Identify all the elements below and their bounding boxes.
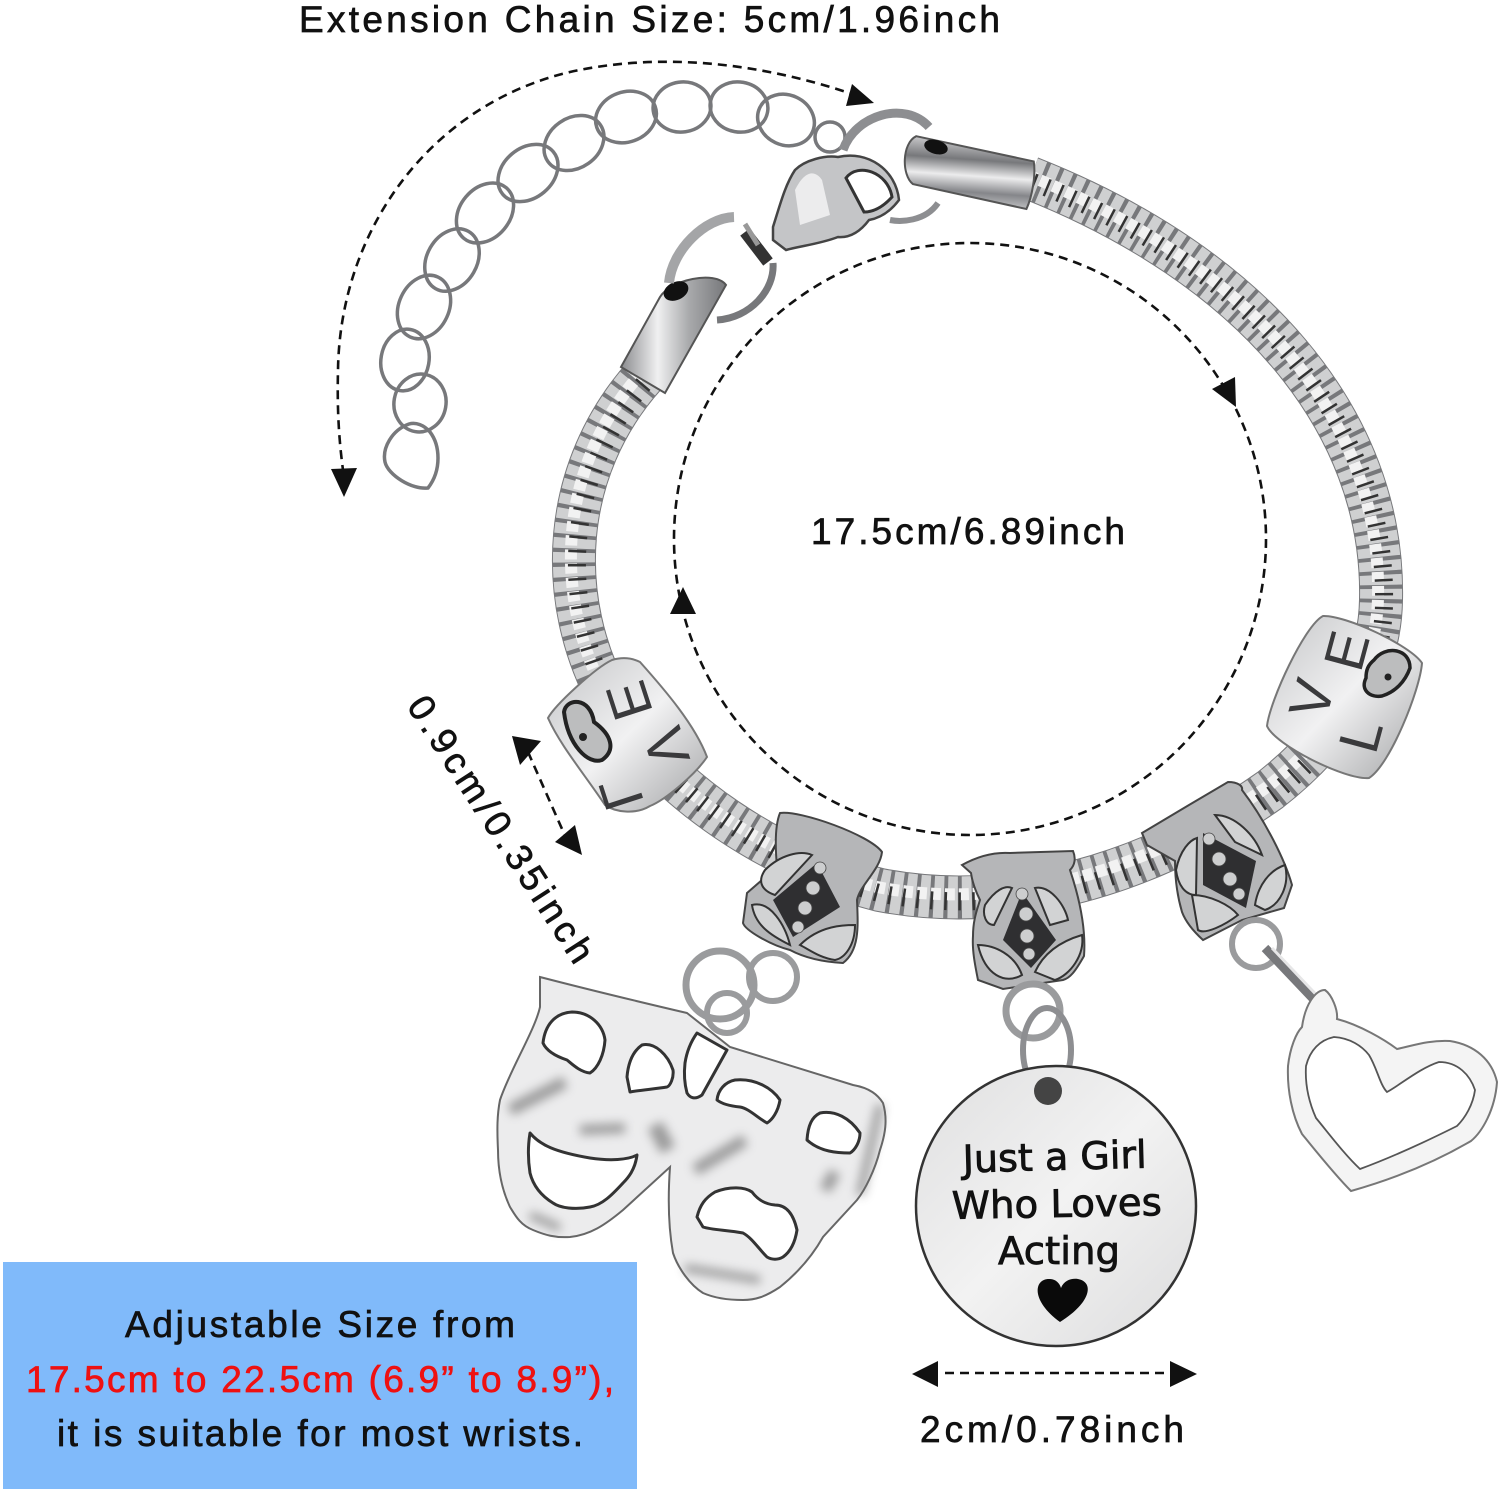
extension chain (376, 77, 845, 488)
charm: open heart (1288, 990, 1497, 1191)
charm: round tag (916, 1066, 1196, 1346)
jump rings for charms (686, 920, 1326, 1092)
label: inner circumference: 17.5cm/6.89inch (811, 511, 1125, 552)
snake chain bracelet (571, 175, 1384, 901)
LOVE bead right: E (1311, 624, 1382, 677)
jump rings and lobster clasp (669, 113, 938, 320)
tag text: Just a Girl (960, 1133, 1147, 1181)
LOVE bead right: V (1276, 672, 1347, 725)
callout: adjustable size (3, 1262, 637, 1489)
LOVE bead right: L (1326, 712, 1395, 759)
arrow: extension chain dimension (331, 62, 874, 497)
arrow: inner circumference dimension (670, 243, 1266, 835)
flower bail centre (962, 851, 1084, 989)
end cap left (621, 277, 726, 393)
charm: hanging loop on masks (707, 993, 747, 1033)
LOVE bead left: E (594, 673, 665, 728)
LOVE bead left: V (631, 719, 702, 775)
LOVE bead right (1267, 616, 1422, 778)
tag text: Who Loves (951, 1180, 1162, 1228)
tag text (951, 1133, 1162, 1273)
clasp end cap right (902, 135, 1036, 209)
LOVE bead left (548, 658, 707, 818)
heading: extension chain size: Extension Chain Size: 5cm/1.96inch (299, 0, 1000, 40)
mask shading (510, 1082, 880, 1280)
label: pendant width: 2cm/0.78inch (920, 1409, 1184, 1450)
flower bail right (1142, 782, 1292, 940)
arrow: pendant width (912, 1361, 1197, 1387)
tag text: Acting (998, 1229, 1120, 1273)
flower bail left (743, 813, 882, 963)
callout: adjustable size: 17.5cm to 22.5cm (6.9” to 8.9”), (26, 1359, 614, 1400)
LOVE bead left: L (587, 769, 656, 818)
label: bead width: 0.9cm/0.35inch (399, 688, 603, 970)
charm: theatre masks (497, 977, 886, 1300)
callout: adjustable size: it is suitable for most wrists. (57, 1413, 583, 1454)
arrow: bead width (512, 736, 582, 855)
callout: adjustable size: Adjustable Size from (125, 1304, 515, 1345)
